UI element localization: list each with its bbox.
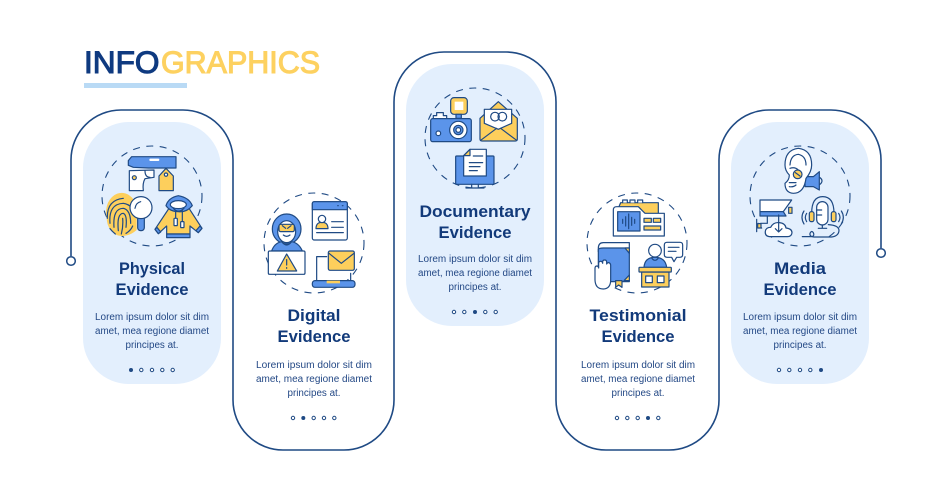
panel: media evidence	[731, 122, 869, 384]
pagination dots	[291, 416, 336, 420]
panel: physical evidence	[83, 122, 221, 384]
panel: testimonial evidence	[581, 193, 695, 420]
body text: amet, mea regione diamet	[418, 268, 532, 279]
body text: principes at.	[774, 340, 826, 351]
panel: digital evidence	[256, 193, 372, 420]
pagination dots	[129, 368, 174, 372]
icon circle: digital evidence	[264, 193, 364, 293]
pagination dots	[615, 416, 660, 420]
heading: Documentary	[420, 203, 531, 221]
body text	[581, 360, 695, 399]
body text: Lorem ipsum dolor sit dim	[743, 312, 857, 323]
heading: Media	[774, 260, 827, 278]
body text: amet, mea regione diamet	[743, 326, 857, 337]
title: GRAPHICS	[161, 44, 320, 80]
body text: principes at.	[448, 282, 502, 293]
body text	[418, 254, 532, 293]
heading	[590, 307, 686, 346]
body text: amet, mea regione diamet	[256, 374, 372, 385]
body text: amet, mea regione diamet	[95, 326, 209, 337]
heading	[764, 260, 836, 299]
body text: principes at.	[288, 388, 340, 399]
heading: Testimonial	[590, 307, 686, 325]
body text: Lorem ipsum dolor sit dim	[581, 360, 695, 371]
pagination dots	[777, 368, 823, 372]
body text: Lorem ipsum dolor sit dim	[418, 254, 532, 265]
heading: Evidence	[278, 328, 350, 346]
body text	[95, 312, 209, 351]
heading: Evidence	[764, 281, 836, 299]
heading	[278, 307, 350, 346]
card background	[406, 64, 544, 326]
heading: Evidence	[602, 328, 674, 346]
panel: documentary evidence	[406, 64, 544, 326]
body text: principes at.	[126, 340, 178, 351]
icon circle: media evidence	[750, 146, 850, 246]
heading: Evidence	[116, 281, 188, 299]
heading: Digital	[288, 307, 340, 325]
connector outline	[67, 52, 885, 450]
heading: Physical	[119, 260, 185, 278]
pagination dots	[452, 310, 497, 314]
body text: Lorem ipsum dolor sit dim	[256, 360, 372, 371]
body text: principes at.	[612, 388, 664, 399]
title underline	[84, 83, 187, 88]
title: INFO	[84, 44, 160, 80]
heading	[116, 260, 188, 299]
icon circle: physical evidence	[102, 146, 202, 246]
body text	[256, 360, 372, 399]
title	[84, 44, 320, 80]
icon circle: documentary evidence	[425, 88, 525, 188]
icon circle: testimonial evidence	[587, 193, 687, 293]
body text: amet, mea regione diamet	[581, 374, 695, 385]
card background	[731, 122, 869, 384]
heading	[420, 203, 531, 242]
body text: Lorem ipsum dolor sit dim	[95, 312, 209, 323]
heading: Evidence	[438, 224, 512, 242]
body text	[743, 312, 857, 351]
card background	[83, 122, 221, 384]
